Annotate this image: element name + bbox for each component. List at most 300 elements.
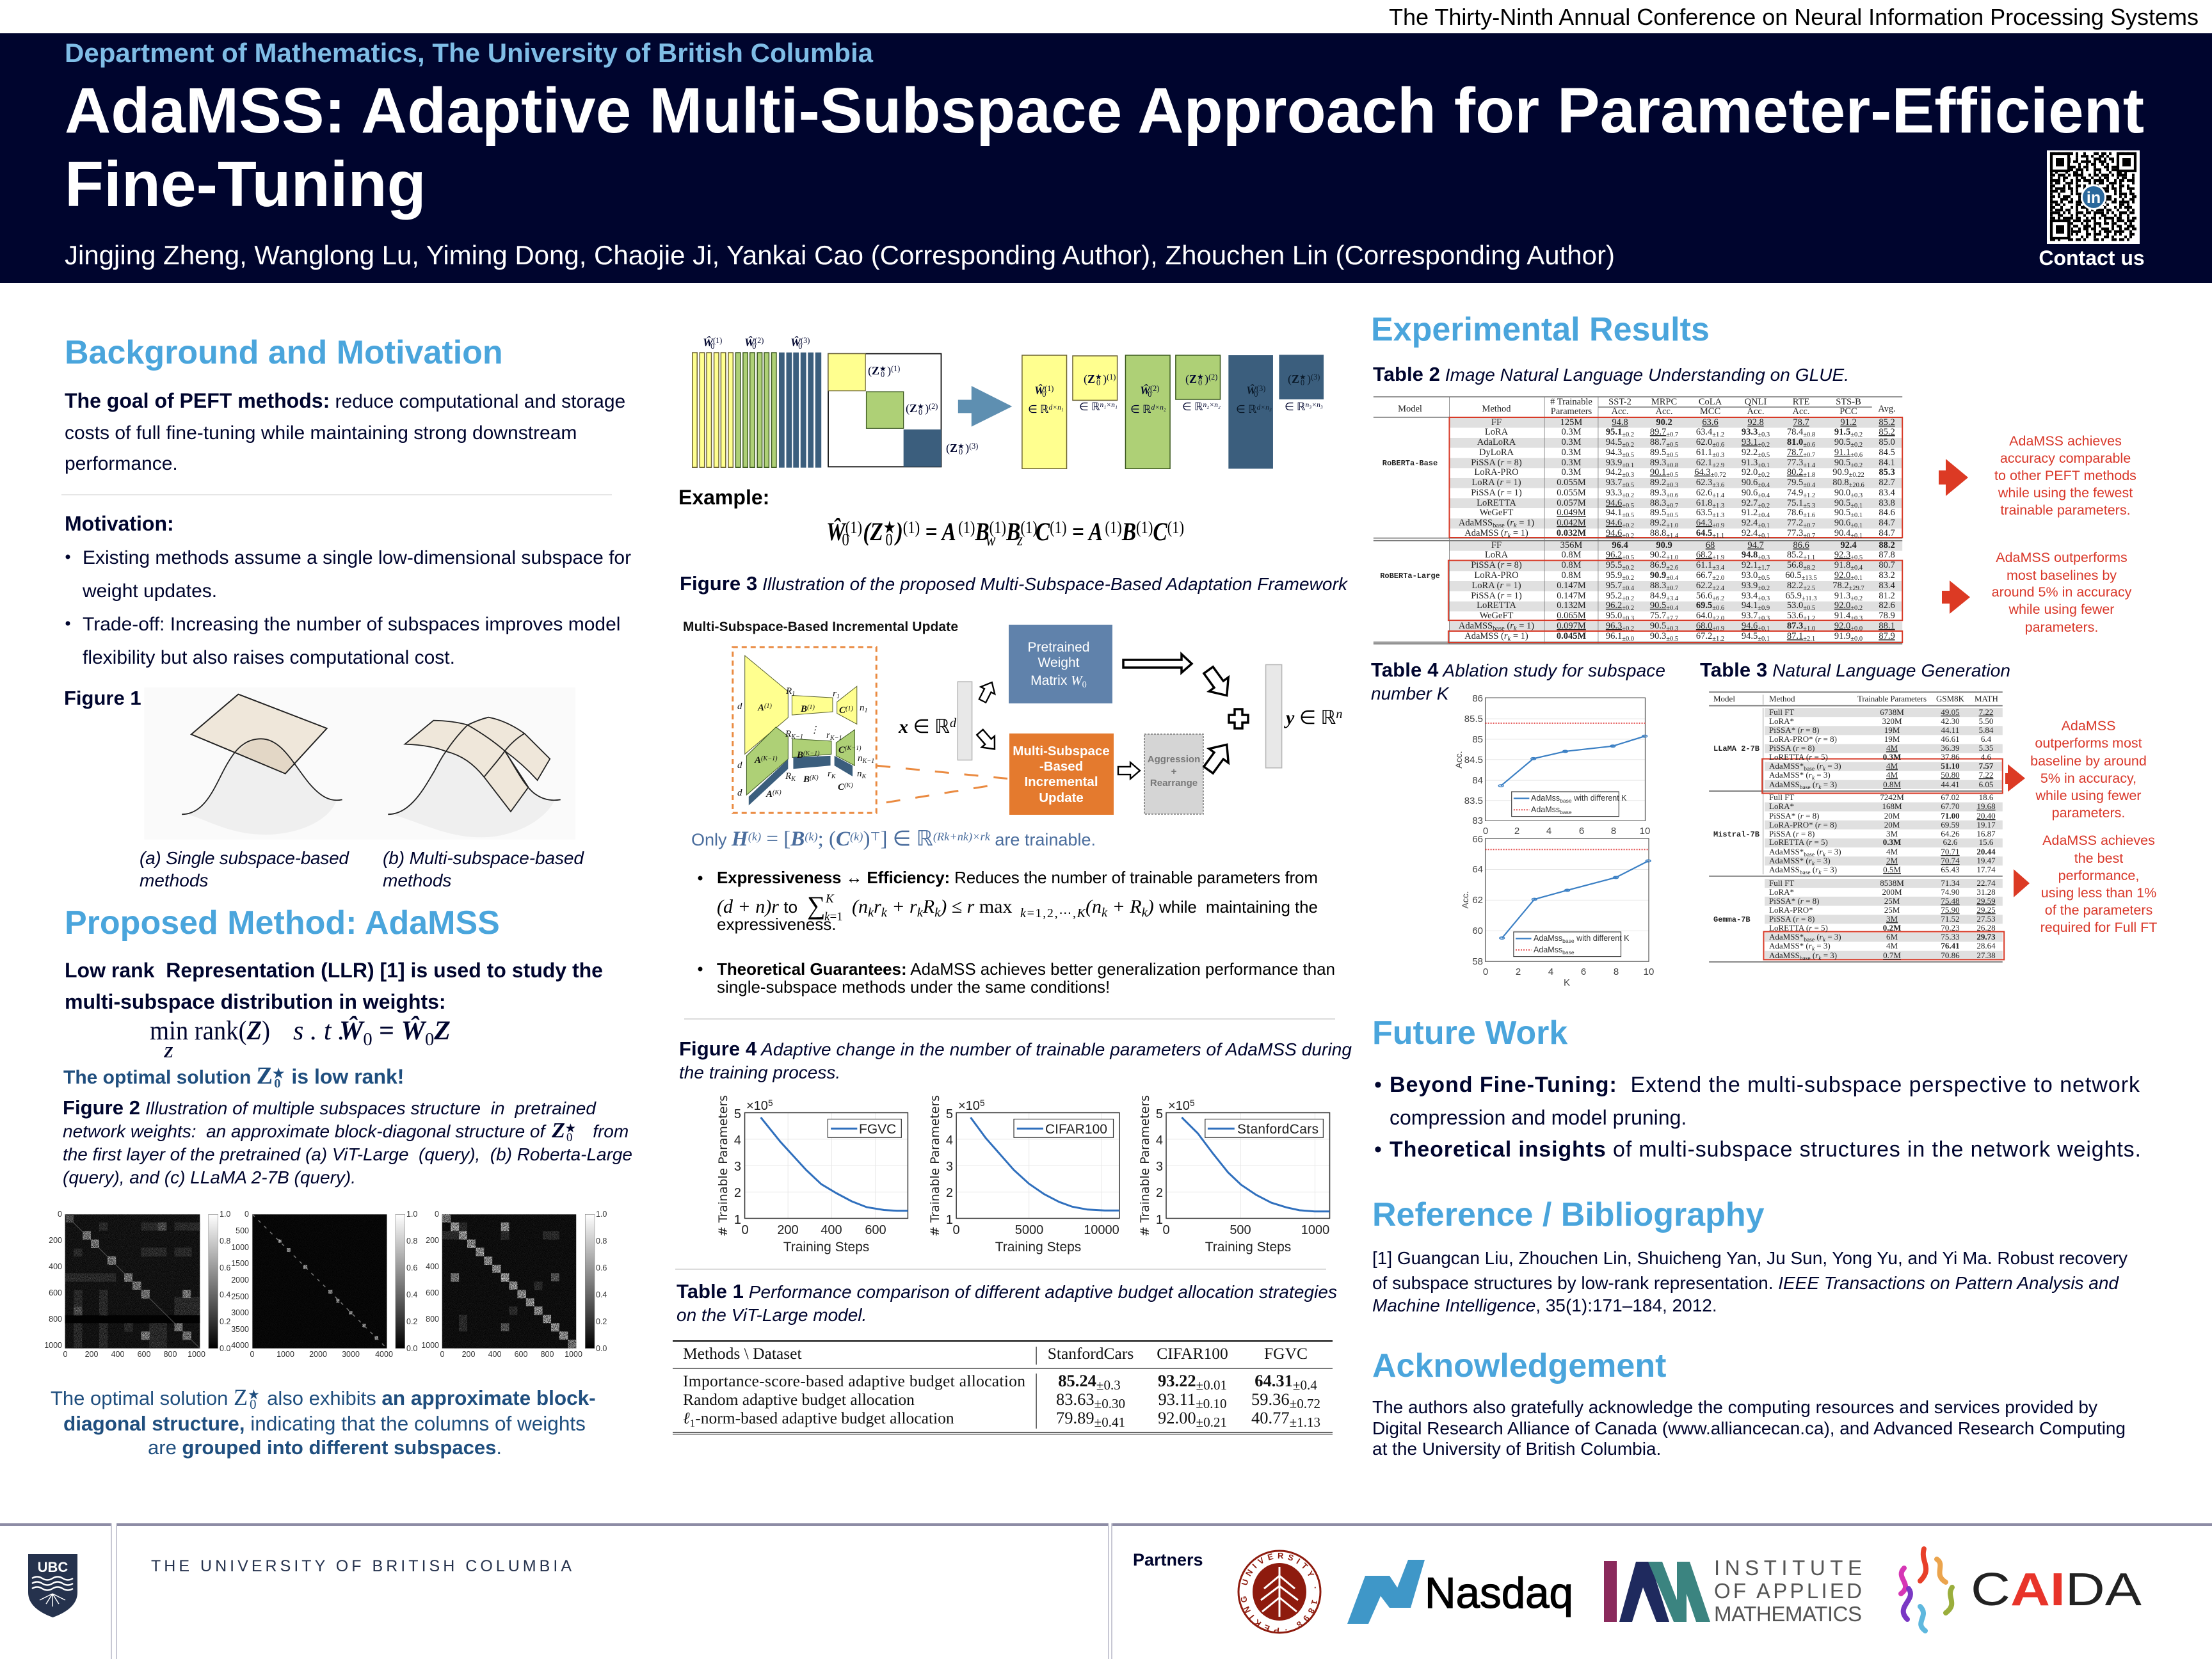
table 2: 63.5±1.3 [1696,508,1724,519]
table 3: Trainable Parameters [1857,694,1927,703]
pretrained weight box: Pretrained [1028,640,1089,655]
table 3: 29.73 [1976,932,1996,942]
table 2: 93.1±0.2 [1742,437,1770,449]
heatmap b: 3500 [231,1325,249,1334]
chart CIFAR100: 0 [952,1223,960,1237]
ablation plot top: 86 [1472,693,1483,704]
title [65,75,2144,220]
chart CIFAR100 [928,1095,1119,1254]
table 2: 85.2±1.1 [1787,550,1815,561]
table 3: AdaMSS* (rk = 3) [1769,856,1831,867]
heatmap c: 0.4 [596,1290,607,1299]
block-diagonal conclusion [51,1384,596,1459]
table 1: 93.11±0.10 [1158,1390,1226,1411]
table 2: 90.6±0.4 [1742,488,1770,499]
ablation plot bottom: 60 [1472,926,1483,936]
diagram labels: ∈ ℝn₃×n₃ [1285,401,1323,413]
heatmap b: 2000 [309,1350,327,1359]
ablation plot bottom: 6 [1581,966,1586,977]
heatmap a: 0.8 [220,1237,230,1246]
table 2: Acc. [1793,406,1809,417]
table 3: 19M [1884,734,1900,744]
chart StanfordCars: 0 [1162,1223,1170,1237]
block-diagonal conclusion: The optimal solution Z★0 also exhibits an approximate block- [51,1384,596,1412]
chart StanfordCars: 1 [1156,1213,1163,1227]
ablation plot bottom: AdaMssbase with different K [1534,934,1630,944]
chart FGVC: 4 [734,1134,741,1148]
goal text: The goal of PEFT methods: reduce computational and storage [65,389,625,412]
table 2: 83.4 [1879,581,1895,591]
strips [693,353,733,467]
figure 3 framework diagram [683,620,1342,815]
conference name: The Thirty-Ninth Annual Conference on Neural Information Processing Systems [1389,4,2199,30]
table 3: 3M [1886,829,1898,838]
heatmap b: 3000 [231,1308,249,1317]
chart CIFAR100: 5000 [1015,1223,1043,1237]
heatmap b: 2500 [231,1292,249,1301]
table 3: 19.47 [1976,856,1996,865]
table 2: RoBERTa-Large [1380,572,1440,581]
table 1 caption: on the ViT-Large model. [677,1305,867,1325]
table 3: 7242M [1880,792,1904,802]
heatmap c: 0.2 [596,1317,607,1326]
heatmap b: 0.0 [406,1344,417,1353]
table 2: 86.6 [1793,540,1809,550]
heatmap c: 400 [488,1350,501,1359]
table 2: 82.7 [1879,477,1895,488]
table 2: 87.3±1.0 [1787,621,1815,632]
ablation plot top: 83.5 [1464,796,1483,806]
table 3: 7.22 [1979,770,1993,780]
table 2: 84.5 [1879,447,1895,458]
table 3: Mistral-7B [1713,830,1759,839]
chart CIFAR100: 1 [946,1213,953,1227]
table 2: Acc. [1656,406,1672,417]
table 2: 88.8±1.4 [1650,528,1678,540]
chart StanfordCars: 500 [1230,1223,1251,1237]
diagram heading: Multi-Subspace-Based Incremental Update [683,620,958,634]
table 2: 94.1±0.9 [1742,600,1770,612]
table 3: LoRETTA (r = 5) [1769,837,1828,847]
panel: figure 1 [64,687,584,890]
diagram labels: ∈ ℝd×n₁ [1028,403,1064,415]
motivation list: flexibility but also raises computational cost. [83,647,455,668]
heatmap b: 1.0 [406,1210,417,1219]
table 2: 0.032M [1557,528,1586,538]
logo: Institute of Applied Mathematics [1604,1556,1862,1626]
table 2: 0.3M [1561,458,1582,468]
table 1: 92.00±0.21 [1158,1408,1227,1430]
aggregation box [1144,734,1203,814]
incremental update box: -Based [1039,759,1083,774]
table 2: 0.045M [1557,631,1586,641]
table 2: 96.1±0.0 [1606,631,1634,643]
matrix [828,354,941,467]
table 3: AdaMSSbase (rk = 3) [1769,950,1837,962]
figure 2 caption: Figure 2 Illustration of multiple subspaces structure in pretrained [63,1096,597,1119]
heading: Background and Motivation [65,334,503,371]
callout 2: most baselines by [2007,568,2117,583]
table 3: PiSSA (r = 8) [1769,914,1815,924]
table 3: 4.6 [1981,752,1992,762]
table 3: AdaMSSbase (rk = 3) [1769,780,1837,791]
table 4 caption [1371,659,1665,703]
expressiveness bullet: while maintaining the [1158,897,1318,917]
motivation list: weight updates. [82,581,217,602]
motivation list: Trade-off: Increasing the number of subspaces improves model [83,614,620,635]
table 2: 79.5±0.4 [1787,477,1815,489]
table 3: LoRA-PRO* [1769,905,1813,915]
acknowledgement text: Digital Research Alliance of Canada (www.alliancecan.ca), and Advanced Research Computing [1372,1418,2126,1438]
table 3: 70.23 [1941,923,1960,933]
table 3: 5.35 [1979,743,1993,753]
table 3: 25M [1884,905,1900,915]
table 2: 92.0±0.2 [1742,467,1770,479]
table 3: 22.74 [1976,878,1996,888]
table 2: 89.5±0.5 [1650,508,1678,519]
table 3 [1709,692,2004,962]
motivation list: Motivation: [65,512,174,535]
table 3: 67.02 [1941,792,1960,802]
table 3: LoRA* [1769,801,1794,811]
heatmap a: 0 [63,1350,68,1359]
table 2: 63.4±1.2 [1696,427,1724,438]
table 2: 83.2 [1879,570,1895,581]
table 2: 91.4±0.3 [1834,611,1863,622]
heatmap c: 200 [426,1236,439,1245]
low rank description [65,959,603,1013]
table 2: 89.2±1.0 [1650,518,1678,529]
table 3: Gemma-7B [1713,915,1751,924]
heatmap c: 0.8 [596,1237,607,1246]
pretrained weight box: Weight [1038,655,1080,670]
chart CIFAR100: 2 [946,1186,953,1200]
callout 4: AdaMSS achieves [2042,833,2155,848]
low rank description: multi-subspace distribution in weights: [65,990,446,1013]
future work bullets [1374,1073,2141,1162]
table 2: 63.6 [1702,417,1719,428]
footer [0,1523,2212,1659]
diagram labels: (Z★0)(3) [946,442,978,456]
table 2: 92.3±0.5 [1834,550,1863,561]
chart StanfordCars: StanfordCars [1237,1122,1318,1137]
table 2: 93.3±0.2 [1606,488,1634,499]
heatmap b: 1500 [231,1259,249,1268]
shape labels: RK−1 [785,729,803,741]
table 2: 75.1±5.3 [1787,498,1815,509]
table 2: 90.5±0.2 [1834,458,1863,469]
shape labels: C(K−1) [838,745,862,755]
table 2: 90.9±0.4 [1650,570,1678,582]
table 3: 0.7M [1883,950,1901,960]
table 2: 92.0±0.0 [1834,621,1863,632]
diagram labels: Ŵ(1)0 [703,335,722,351]
callout 3: AdaMSS [2062,718,2115,733]
figure 4 caption: the training process. [679,1062,840,1082]
logo: CAIDA: CAIDA [1971,1564,2142,1615]
table 2: 0.8M [1561,550,1582,560]
ablation plot bottom: 10 [1644,966,1654,977]
diagram labels: (Z★0)(1) [1084,373,1116,387]
ablation plot top: 84 [1472,775,1483,786]
callout 1: AdaMSS achieves [2009,433,2122,449]
chart CIFAR100: 4 [946,1134,953,1148]
goal text [65,389,625,474]
shape labels: B(K−1) [796,750,820,760]
table 3: 320M [1882,716,1902,726]
logo: Nasdaq: Nasdaq [1425,1569,1573,1617]
table 2: 0.8M [1561,570,1582,581]
ablation plot top: 0 [1483,826,1488,837]
table 3: 19M [1884,725,1900,735]
diagram labels: ∈ ℝn₂×n₂ [1182,401,1221,413]
table 2: 94.5±0.1 [1742,631,1770,643]
table 2: 96.3±0.2 [1606,621,1634,632]
heading: Reference / Bibliography [1372,1196,1765,1233]
title: AdaMSS: Adaptive Multi-Subspace Approach for Parameter-Efficient [65,75,2144,147]
shape labels: rK−1 [826,730,842,742]
heatmap c: 400 [426,1262,439,1271]
table 2 [1374,397,1902,644]
table 2: 84.6 [1879,508,1895,518]
block-diagonal conclusion: diagonal structure, indicating that the columns of weights [63,1412,586,1435]
future work bullets: • [1374,1137,1382,1162]
logo: Peking University: PEKING UNIVERSITY · 1898 · [1240,1553,1317,1633]
heatmap a: 200 [49,1236,62,1245]
table 2: 78.6±1.6 [1787,508,1815,519]
table 2: 91.8±0.4 [1834,560,1863,572]
table 3: 7.57 [1979,761,1994,771]
shape labels: B(1) [800,704,815,714]
table 3: 6M [1886,932,1898,942]
panel: reference [1372,1196,2128,1315]
heatmap a: 0.4 [220,1290,230,1299]
table 2: 95.0±0.3 [1606,611,1634,622]
table 2: AdaLoRA [1477,437,1516,447]
expressiveness bullet: (nkrk + rkRk) ≤ r max [852,896,1012,920]
table 2: 90.5±0.1 [1834,498,1863,509]
table 3: LoRA-PRO* (r = 8) [1769,820,1837,830]
table 3: 4M [1886,770,1898,780]
table 2: LoRA-PRO [1474,570,1519,581]
ablation plot bottom: 2 [1516,966,1521,977]
callout 3: while using fewer [2035,788,2141,803]
table 2: 82.2±2.5 [1787,581,1815,592]
optimization formula: s . t . [293,1016,345,1046]
table 3: 44.11 [1941,725,1959,735]
red arrow 4 [2014,869,2030,897]
table 3: 16.87 [1976,829,1996,838]
table 2: 91.9±0.0 [1834,631,1863,643]
table 2: 85.0 [1879,437,1895,447]
table 3: 5.84 [1979,725,1994,735]
table 3: AdaMSS*base (rk = 3) [1769,847,1841,858]
table 3: 15.6 [1979,837,1994,847]
table 2: 86.9±2.6 [1650,560,1678,572]
table 2: 91.3±0.1 [1742,458,1770,469]
table 2: 93.4±0.3 [1742,591,1770,602]
table 2: 87.1±2.1 [1787,631,1815,643]
red arrow 2 [1942,581,1970,614]
table 3: 25M [1884,896,1900,906]
ablation plot bottom: 8 [1614,966,1619,977]
table 2: 90.9 [1656,540,1672,550]
table 2: 53.6±1.2 [1787,611,1815,622]
table 3: 19.17 [1976,820,1996,830]
heatmap c: 800 [426,1315,439,1324]
table 3: MATH [1975,694,1998,703]
table 3: 0.8M [1883,780,1901,789]
table 3: LoRA* [1769,716,1794,726]
goal text: costs of full fine-tuning while maintaining strong downstream [65,422,577,444]
table 2: PiSSA (r = 1) [1471,591,1522,601]
diagram labels: ∈ ℝn₁×n₁ [1079,401,1118,413]
table 2: 0.3M [1561,467,1582,477]
table 2: AdaMSSbase (rk = 1) [1459,621,1534,632]
table 3: 70.71 [1941,847,1960,856]
table 2: 64.5±1.1 [1696,528,1724,540]
table 2: 90.1±0.5 [1650,467,1678,479]
QR code: in [2087,189,2101,207]
optimization formula: min rank(Z) [150,1016,270,1046]
table 2: 85.2 [1879,427,1895,437]
ablation plot top: AdaMssbase [1531,805,1572,815]
table 2: 0.055M [1557,488,1586,498]
citation: Machine Intelligence, 35(1):171–184, 2012. [1372,1295,1717,1315]
table 2: 88.1 [1879,621,1895,631]
table 2: 61.8±1.3 [1696,498,1724,509]
table 3: 4M [1886,761,1898,771]
table 2: 94.1±0.5 [1606,508,1634,519]
table 1 caption: Table 1 Performance comparison of different adaptive budget allocation strategies [677,1280,1337,1302]
table 2: 77.2±0.7 [1787,518,1815,529]
ablation plot bottom: 4 [1548,966,1553,977]
heatmap b: 0.6 [406,1263,417,1272]
table 2: 92.4±0.1 [1742,528,1770,540]
table 2: 92.4±0.1 [1742,518,1770,529]
chart CIFAR100: # Trainable Parameters [928,1095,942,1237]
table 3: 27.38 [1976,950,1996,960]
table 2: 95.2±0.2 [1606,591,1634,602]
heatmap a [44,1210,230,1359]
callout 1: while using the fewest [1998,485,2133,501]
table 3: AdaMSSbase (rk = 3) [1769,865,1837,876]
table 2: 90.6±0.1 [1834,518,1863,529]
callout 4: of the parameters [2045,902,2152,918]
table 2 caption: Table 2 Image Natural Language Understanding on GLUE. [1373,363,1849,385]
chart CIFAR100: Training Steps [995,1240,1081,1254]
ablation plot bottom: 62 [1472,895,1483,906]
table 2: QNLI [1745,397,1767,407]
heatmap c: 1000 [565,1350,582,1359]
QR code [2047,150,2140,244]
table 2: 74.9±1.2 [1787,488,1815,499]
diagram labels: (Z★0)(2) [906,402,938,417]
table 2: PiSSA (r = 8) [1471,560,1522,570]
table 2: 65.9±11.3 [1785,591,1817,602]
heatmap b: 1000 [276,1350,294,1359]
UBC logo [28,1554,77,1617]
table 3: 2M [1886,856,1898,865]
red arrow 3 [2005,764,2025,792]
shape labels: RK [785,771,796,783]
table 2: PiSSA (r = 8) [1471,458,1522,468]
table 1: StanfordCars [1048,1344,1134,1363]
shape labels: A(K−1) [754,755,778,765]
table 2: 90.5±0.4 [1650,600,1678,612]
table 3: 20M [1884,811,1900,821]
ablation plot top: 6 [1579,826,1584,837]
table 2: 0.055M [1557,477,1586,488]
table 2: LoRETTA [1477,600,1516,611]
callout 1 [1994,433,2136,518]
table 2: 96.4 [1612,540,1628,550]
chart StanfordCars: # Trainable Parameters [1138,1095,1152,1237]
table 2: 0.065M [1557,611,1586,621]
table 2: AdaMSS (rk = 1) [1464,631,1528,643]
table 1: 79.89±0.41 [1056,1408,1125,1430]
table 3: 4M [1886,941,1898,950]
table 2: 78.7±0.7 [1787,447,1815,459]
table 2: 93.0±0.5 [1742,570,1770,582]
future work bullets: Theoretical insights of multi-subspace structures in the network weights. [1390,1137,2141,1162]
heading: Experimental Results [1371,311,1710,348]
table 2: 83.8 [1879,498,1895,508]
table 2: 69.5±0.6 [1696,600,1724,612]
heatmap b: 4000 [231,1341,249,1350]
pretrained weight box: Matrix W0 [1030,673,1087,690]
chart FGVC: 0 [741,1223,749,1237]
heatmap c: 200 [462,1350,475,1359]
heatmap b: 3000 [342,1350,360,1359]
figure 4 caption: Figure 4 Adaptive change in the number of trainable parameters of AdaMSS during [679,1038,1352,1060]
table 2: 90.9±0.22 [1832,467,1864,479]
table 2: 77.3±1.4 [1787,458,1815,469]
trainable statement: Only H(k) = [B(k); (C(k))⊤] ∈ ℝ(Rk+nk)×rk are trainable. [691,828,1096,851]
chart FGVC: ×105 [746,1098,773,1113]
figure 3 caption: Figure 3 Illustration of the proposed Multi-Subspace-Based Adaptation Framework [680,572,1349,595]
figure 2 subspace decomposition diagram [693,335,1324,469]
heatmap b: 2000 [231,1276,249,1285]
table 2: 94.2±0.3 [1606,467,1634,479]
table 2: 90.0±0.3 [1834,488,1863,499]
table 2: FF [1491,417,1502,428]
optimization formula: Ŵ0 = Ŵ0Z [339,1016,451,1050]
table 2: 84.7 [1879,528,1895,538]
chart StanfordCars: 3 [1156,1160,1163,1174]
ablation plot top: Acc. [1454,751,1464,769]
chart FGVC: FGVC [859,1122,896,1137]
chart FGVC: 5 [734,1107,741,1121]
callout 1: to other PEFT methods [1994,468,2136,483]
table 2: 93.9±0.1 [1606,458,1634,469]
table 2: 0.3M [1561,427,1582,437]
table 3: LoRA* [1769,887,1794,897]
callout 4: the best [2074,851,2123,866]
table 2: 93.7±0.5 [1606,477,1634,489]
diagram labels: Ŵ(1)0 [1034,383,1054,399]
table 4 caption: Table 4 Ablation study for subspace [1371,659,1665,681]
acknowledgement text: at the University of British Columbia. [1372,1439,1661,1459]
table 2: 68 [1706,540,1715,550]
heatmap a: 1000 [188,1350,205,1359]
table 1: 83.63±0.30 [1056,1390,1125,1411]
table 3: 44.41 [1941,780,1960,789]
panel: acknowledgement [1372,1347,2126,1459]
table 2: 85.3 [1879,467,1895,477]
table 3: 20.44 [1976,847,1996,856]
table 2: 0.057M [1557,498,1586,508]
